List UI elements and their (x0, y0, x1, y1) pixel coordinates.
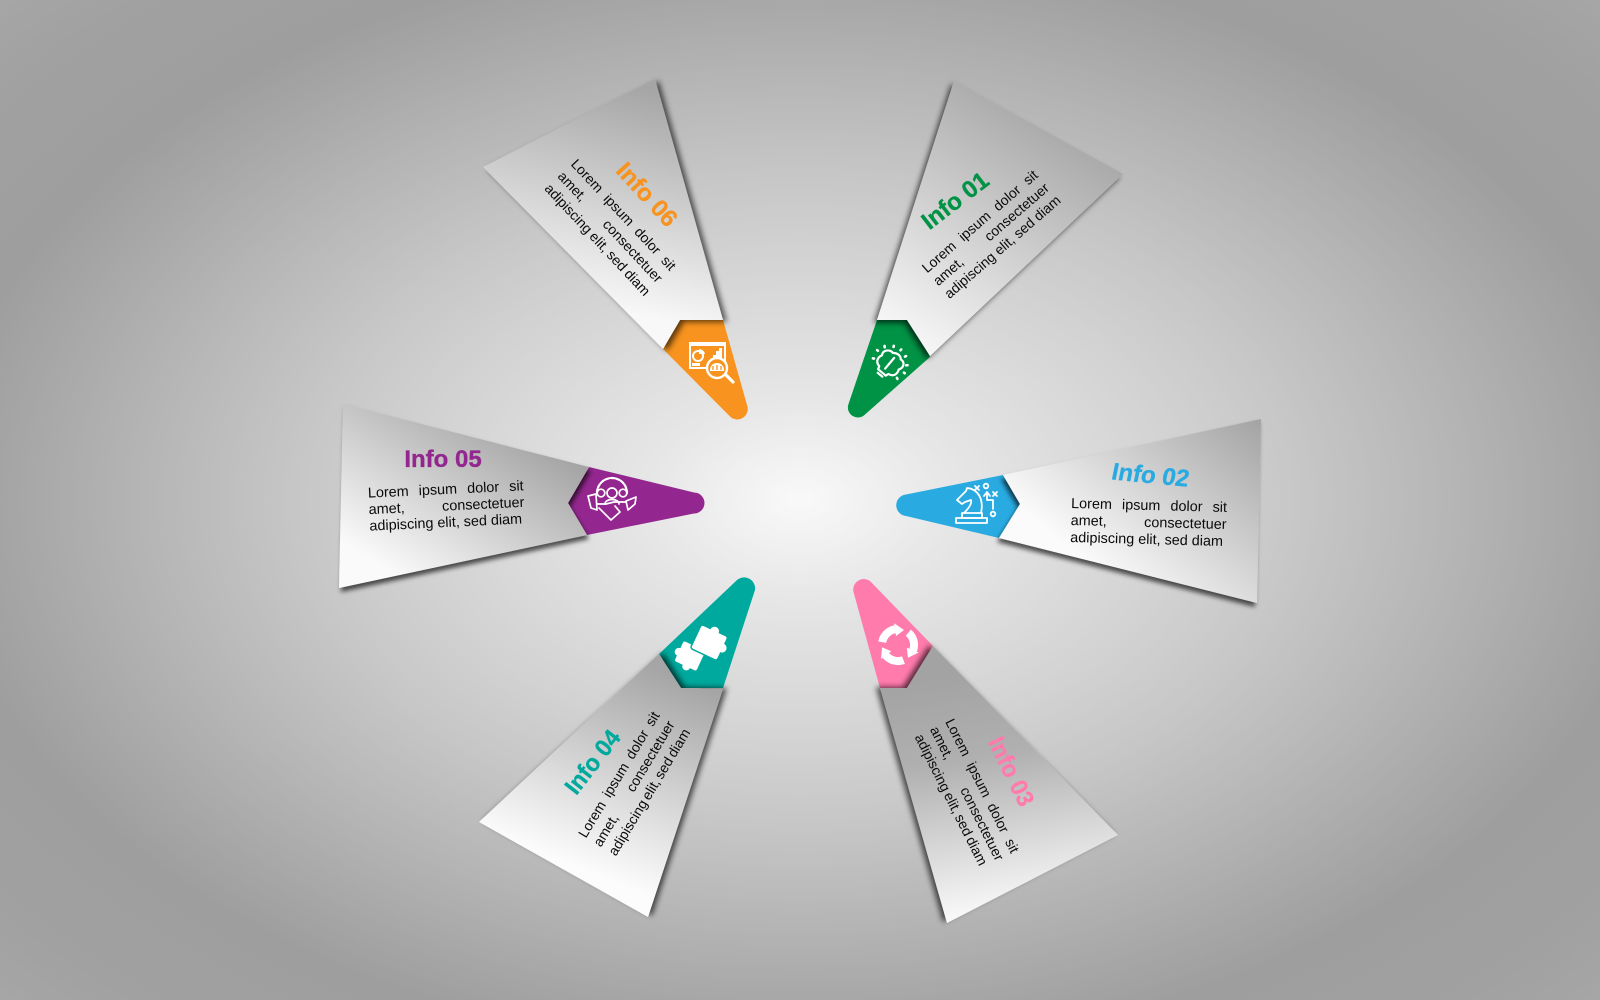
icon: brain light bulb (866, 338, 915, 386)
body text: adipiscing elit, sed diam (1070, 530, 1223, 550)
tab: orange (663, 320, 748, 419)
card (999, 419, 1261, 603)
panel: info 06 (483, 79, 748, 419)
tab: pink (853, 579, 933, 688)
body text: amet, consectetuer (368, 495, 525, 518)
body text: adipiscing elit, sed diam (542, 180, 654, 299)
body text: amet, consectetuer (930, 179, 1052, 289)
heading: Info 03 (982, 733, 1039, 811)
card (483, 79, 723, 349)
heading: Info 02 (1109, 459, 1192, 493)
card (339, 404, 589, 588)
body text: amet, consectetuer (1070, 513, 1227, 533)
heading: Info 06 (610, 157, 683, 233)
icon: cycle arrows (876, 623, 925, 670)
body text: adipiscing elit, sed diam (941, 192, 1064, 301)
card (880, 646, 1118, 923)
icon: data analysis window (690, 343, 733, 382)
heading: Info 04 (560, 724, 627, 800)
body text: adipiscing elit, sed diam (912, 731, 991, 868)
card (877, 81, 1123, 356)
panel: info 02 (896, 419, 1261, 603)
body text: Lorem ipsum dolor sit (919, 167, 1041, 276)
body text: amet, consectetuer (590, 717, 678, 849)
icon: puzzle pieces (669, 621, 733, 675)
tab: green (848, 320, 930, 417)
body text: amet, consectetuer (927, 724, 1008, 863)
body text: Lorem ipsum dolor sit (575, 708, 663, 840)
body text: Lorem ipsum dolor sit (568, 156, 679, 274)
body text: Lorem ipsum dolor sit (368, 478, 524, 502)
panel: info 03 (853, 579, 1118, 923)
icon: chess knight strategy (956, 484, 997, 523)
panel: info 04 (479, 577, 755, 917)
body text: Lorem ipsum dolor sit (942, 716, 1023, 856)
body text: amet, consectetuer (555, 168, 666, 286)
body text: adipiscing elit, sed diam (605, 726, 693, 858)
card (479, 654, 723, 917)
tab: purple (568, 467, 704, 535)
icon: teamwork handshake (588, 478, 636, 520)
heading: Info 01 (917, 167, 994, 235)
panel: info 05 (339, 404, 704, 588)
tab: teal (659, 577, 755, 688)
heading: Info 05 (404, 446, 482, 473)
panel: info 01 (848, 81, 1123, 417)
tab: blue (896, 475, 1020, 538)
body text: Lorem ipsum dolor sit (1071, 496, 1227, 516)
body text: adipiscing elit, sed diam (369, 511, 522, 535)
